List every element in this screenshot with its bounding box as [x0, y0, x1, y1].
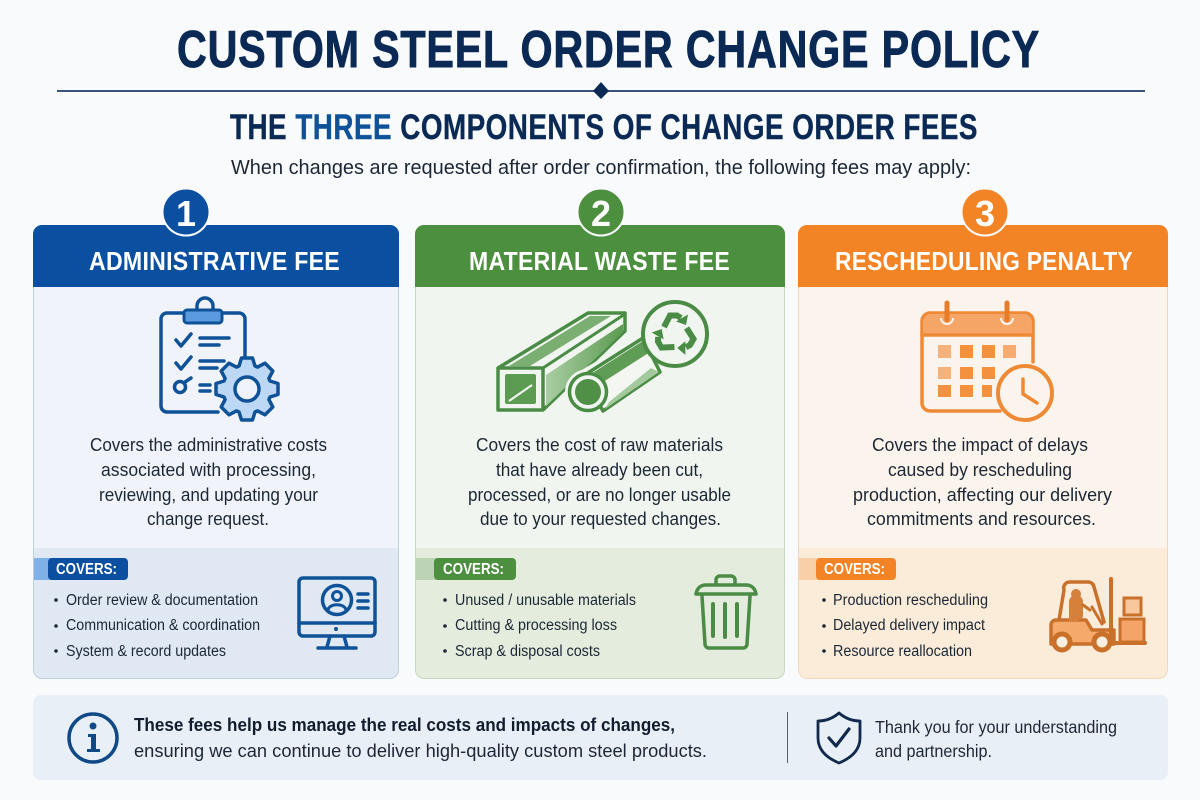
panel: material waste fee	[415, 188, 785, 678]
panel: administrative fee	[33, 188, 399, 678]
panel: rescheduling penalty	[798, 188, 1168, 678]
footer message: These fees help us manage the real costs and impacts of changes,	[134, 715, 675, 735]
footer message	[134, 715, 707, 761]
number badge 2: 2	[591, 193, 611, 234]
covers background: material	[416, 548, 784, 678]
covers list: administrative: System & record updates	[66, 643, 226, 660]
covers list: administrative: Communication & coordination	[66, 617, 260, 634]
header bar: material	[415, 225, 785, 287]
covers badge: material	[416, 558, 516, 580]
thank you note: and partnership.	[875, 741, 992, 761]
icon: trash bin	[696, 576, 756, 648]
number badge 3: 3	[975, 193, 995, 234]
header bar: rescheduling	[798, 225, 1168, 287]
description: rescheduling: production, affecting our delivery	[853, 485, 1112, 505]
icon: clipboard with gear	[161, 298, 278, 420]
thank you note: Thank you for your understanding	[875, 717, 1117, 737]
number badge 1: 1	[176, 193, 196, 234]
description: rescheduling: Covers the impact of delays	[872, 435, 1088, 455]
description: administrative: reviewing, and updating your	[99, 485, 318, 505]
description: rescheduling: caused by rescheduling	[888, 460, 1072, 480]
icon: steel tube and pipe with recycle symbol	[498, 302, 707, 415]
title divider with diamond	[57, 82, 1145, 99]
covers badge: rescheduling	[799, 558, 896, 580]
number badge 1	[162, 188, 210, 236]
heading: material waste fee: MATERIAL WASTE FEE	[469, 246, 730, 276]
intro sentence: When changes are requested after order confirmation, the following fees may apply:	[231, 156, 971, 179]
covers list: material	[443, 592, 636, 660]
description: administrative	[90, 435, 327, 529]
description: administrative: change request.	[147, 509, 269, 529]
thank you note	[875, 717, 1117, 761]
covers list: administrative: Order review & documentation	[66, 592, 258, 609]
description: material: processed, or are no longer usable	[468, 485, 731, 505]
covers badge: material: COVERS:	[443, 561, 504, 578]
description: administrative: associated with processing,	[101, 460, 316, 480]
covers badge: administrative	[34, 558, 128, 580]
description: material	[468, 435, 731, 529]
icon: info circle	[69, 714, 117, 762]
covers list: rescheduling: Production rescheduling	[833, 592, 988, 609]
subtitle heading: THE THREE COMPONENTS OF CHANGE ORDER FEES	[230, 108, 978, 147]
icon: forklift with boxes	[1051, 579, 1145, 650]
description: material: due to your requested changes.	[480, 509, 721, 529]
footer panel	[33, 695, 1168, 780]
covers list: material: Unused / unusable materials	[455, 592, 636, 609]
icon: shield with check	[818, 713, 860, 763]
covers background: administrative	[34, 548, 398, 678]
covers list: material: Scrap & disposal costs	[455, 643, 600, 660]
heading: rescheduling penalty: RESCHEDULING PENALTY	[835, 246, 1133, 276]
description: rescheduling: commitments and resources.	[867, 509, 1096, 529]
covers background: rescheduling	[799, 548, 1167, 678]
icon: calendar with clock	[922, 303, 1052, 420]
description: material: that have already been cut,	[496, 460, 703, 480]
covers badge: rescheduling: COVERS:	[824, 561, 885, 578]
description: administrative: Covers the administrative costs	[90, 435, 327, 455]
description: rescheduling	[853, 435, 1112, 529]
covers badge: administrative: COVERS:	[56, 561, 117, 578]
covers list: rescheduling	[822, 592, 988, 660]
covers list: rescheduling: Resource reallocation	[833, 643, 972, 660]
footer message: ensuring we can continue to deliver high-quality custom steel products.	[134, 741, 707, 761]
number badge 3	[962, 188, 1008, 236]
footer divider	[787, 712, 788, 763]
covers list: administrative	[54, 592, 260, 660]
heading: administrative fee: ADMINISTRATIVE FEE	[89, 246, 340, 276]
description: material: Covers the cost of raw materials	[476, 435, 723, 455]
covers list: rescheduling: Delayed delivery impact	[833, 617, 986, 634]
icon: monitor with user profile	[299, 578, 375, 648]
covers list: material: Cutting & processing loss	[455, 617, 617, 634]
header bar: administrative	[33, 225, 399, 287]
number badge 2	[578, 188, 624, 236]
